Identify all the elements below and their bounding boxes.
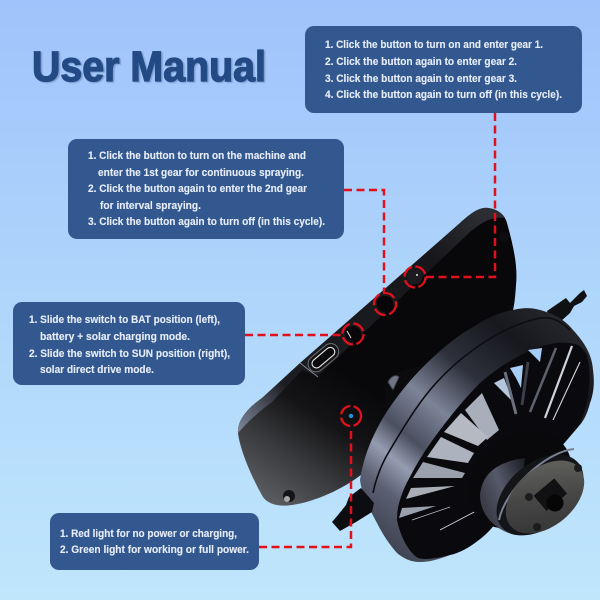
- panel: spray modes: for interval spraying.: [100, 200, 201, 212]
- panel: fan gears: 4. Click the button again to turn off (in this cycle).: [325, 89, 562, 101]
- panel: switch positions: 2. Slide the switch to SUN position (right),: [29, 348, 230, 360]
- button: top: [408, 270, 422, 284]
- panel: switch positions: 1. Slide the switch to BAT position (left),: [29, 314, 220, 326]
- mount nub top: [499, 232, 509, 242]
- connector: spray button: [344, 190, 396, 315]
- panel: spray modes: 2. Click the button again to enter the 2nd gear: [88, 183, 308, 195]
- button: middle: [377, 296, 393, 312]
- USB-C port: [305, 340, 342, 375]
- connector: gear button: [404, 113, 495, 288]
- panel: spray modes: [68, 139, 344, 239]
- title: User Manual: [34, 44, 268, 92]
- connector: light: [259, 406, 361, 547]
- grey wedge blades: [399, 393, 499, 518]
- panel: spray modes: enter the 1st gear for continuous spraying.: [98, 167, 304, 179]
- panel: indicator lights: 2. Green light for working or full power.: [60, 544, 249, 556]
- pale blades and streaks: [412, 346, 580, 530]
- fan stalk: [376, 366, 450, 440]
- solar panel body: [238, 208, 516, 506]
- panel: indicator lights: [50, 513, 259, 570]
- panel: switch positions: solar direct drive mode.: [40, 364, 154, 376]
- panel: fan gears: 3. Click the button again to enter gear 3.: [325, 73, 517, 85]
- indicator light: [349, 414, 353, 418]
- panel: fan gears: 1. Click the button to turn on and enter gear 1.: [325, 39, 543, 51]
- mount nub bottom: [283, 490, 295, 502]
- title: User Manual: [32, 43, 266, 91]
- panel: spray modes: 1. Click the button to turn on the machine and: [88, 150, 306, 162]
- panel: fan gears: 2. Click the button again to enter gear 2.: [325, 56, 517, 68]
- product: solar fan: [238, 208, 599, 562]
- sky gaps: [494, 348, 542, 402]
- fan connector bottom: [332, 488, 374, 531]
- switch: [345, 326, 361, 342]
- connector: switch: [245, 324, 364, 344]
- panel: switch positions: battery + solar charging mode.: [40, 331, 190, 343]
- fan grill: [397, 343, 590, 559]
- panel: switch positions: [13, 302, 245, 385]
- fan hub: [449, 411, 599, 552]
- fan connector top: [547, 290, 587, 322]
- panel: indicator lights: 1. Red light for no power or charging,: [60, 528, 237, 540]
- fan rim: [360, 308, 594, 562]
- panel: spray modes: 3. Click the button again to turn off (in this cycle).: [88, 216, 325, 228]
- panel: fan gears: [305, 26, 582, 113]
